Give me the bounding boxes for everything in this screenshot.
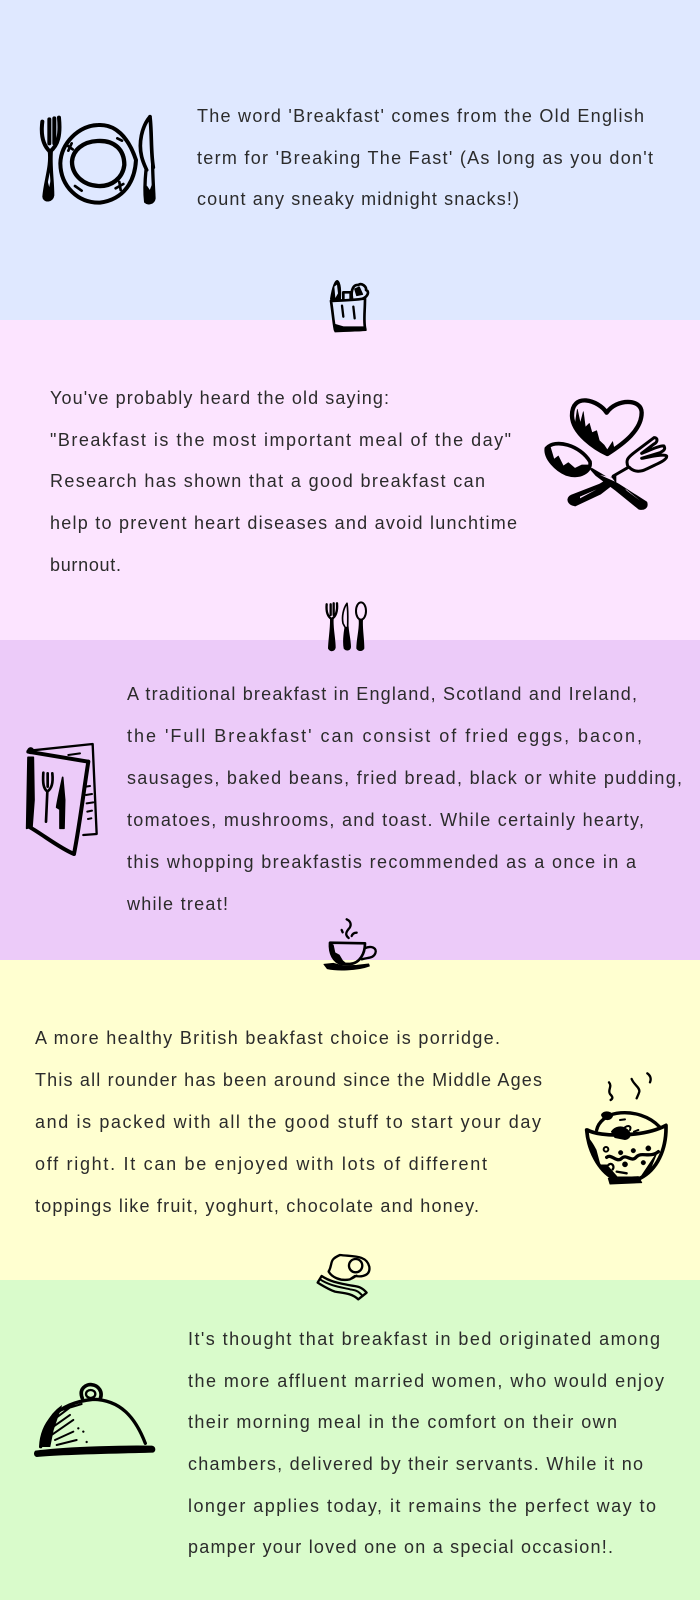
text: word origin: count any sneaky midnight snacks!) <box>197 189 519 209</box>
icon: heart with spoon and fork <box>546 400 667 509</box>
icon: coffee cup <box>324 919 376 970</box>
icon: grocery bag <box>331 281 368 332</box>
icon: serving cloche <box>35 1385 154 1456</box>
text: breakfast in bed: the more affluent married women, who would enjoy <box>188 1371 664 1391</box>
icon: plate with fork and knife <box>42 117 155 203</box>
text: porridge: and is packed with all the good stuff to start your day <box>35 1112 541 1132</box>
text: breakfast in bed: pamper your loved one on a special occasion!. <box>188 1537 613 1557</box>
text: full breakfast: A traditional breakfast in England, Scotland and Ireland, <box>127 684 637 704</box>
icon: cutlery <box>327 602 366 651</box>
text: porridge: toppings like fruit, yoghurt, chocolate and honey. <box>35 1196 479 1216</box>
text: porridge <box>35 1028 542 1216</box>
icon: egg and bacon <box>318 1255 369 1299</box>
text: importance: burnout. <box>50 555 121 575</box>
panel: porridge <box>0 960 700 1280</box>
panel: full breakfast <box>0 640 700 960</box>
text: importance: help to prevent heart diseases and avoid lunchtime <box>50 513 517 533</box>
text: word origin <box>197 106 653 209</box>
text: full breakfast: while treat! <box>126 894 228 914</box>
text: breakfast in bed: chambers, delivered by their servants. While it no <box>188 1454 643 1474</box>
text: importance <box>50 388 517 575</box>
text: breakfast in bed: longer applies today, it remains the perfect way to <box>188 1496 656 1516</box>
text: full breakfast: tomatoes, mushrooms, and toast. While certainly hearty, <box>127 810 644 830</box>
text: full breakfast: the 'Full Breakfast' can consist of fried eggs, bacon, <box>127 726 642 746</box>
icon: porridge bowl <box>587 1073 666 1184</box>
text: importance: Research has shown that a good breakfast can <box>50 471 485 491</box>
text: breakfast in bed <box>188 1329 664 1557</box>
text: importance: You've probably heard the old saying: <box>50 388 389 408</box>
text: porridge: off right. It can be enjoyed with lots of different <box>35 1154 487 1174</box>
panel: importance <box>0 320 700 640</box>
text: full breakfast <box>126 684 682 914</box>
text: porridge: A more healthy British beakfast choice is porridge. <box>35 1028 500 1048</box>
text: importance: "Breakfast is the most important meal of the day" <box>50 430 511 450</box>
text: word origin: term for 'Breaking The Fast' (As long as you don't <box>197 148 653 168</box>
icon: menu <box>27 744 97 854</box>
text: full breakfast: sausages, baked beans, fried bread, black or white pudding, <box>127 768 682 788</box>
text: breakfast in bed: It's thought that breakfast in bed originated among <box>188 1329 660 1349</box>
text: breakfast in bed: their morning meal in the comfort on their own <box>188 1412 617 1432</box>
text: word origin: The word 'Breakfast' comes from the Old English <box>197 106 644 126</box>
text: porridge: This all rounder has been around since the Middle Ages <box>35 1070 542 1090</box>
text: full breakfast: this whopping breakfastis recommended as a once in a <box>127 852 637 872</box>
panel: breakfast in bed <box>0 1280 700 1600</box>
panel: word origin <box>0 0 700 320</box>
